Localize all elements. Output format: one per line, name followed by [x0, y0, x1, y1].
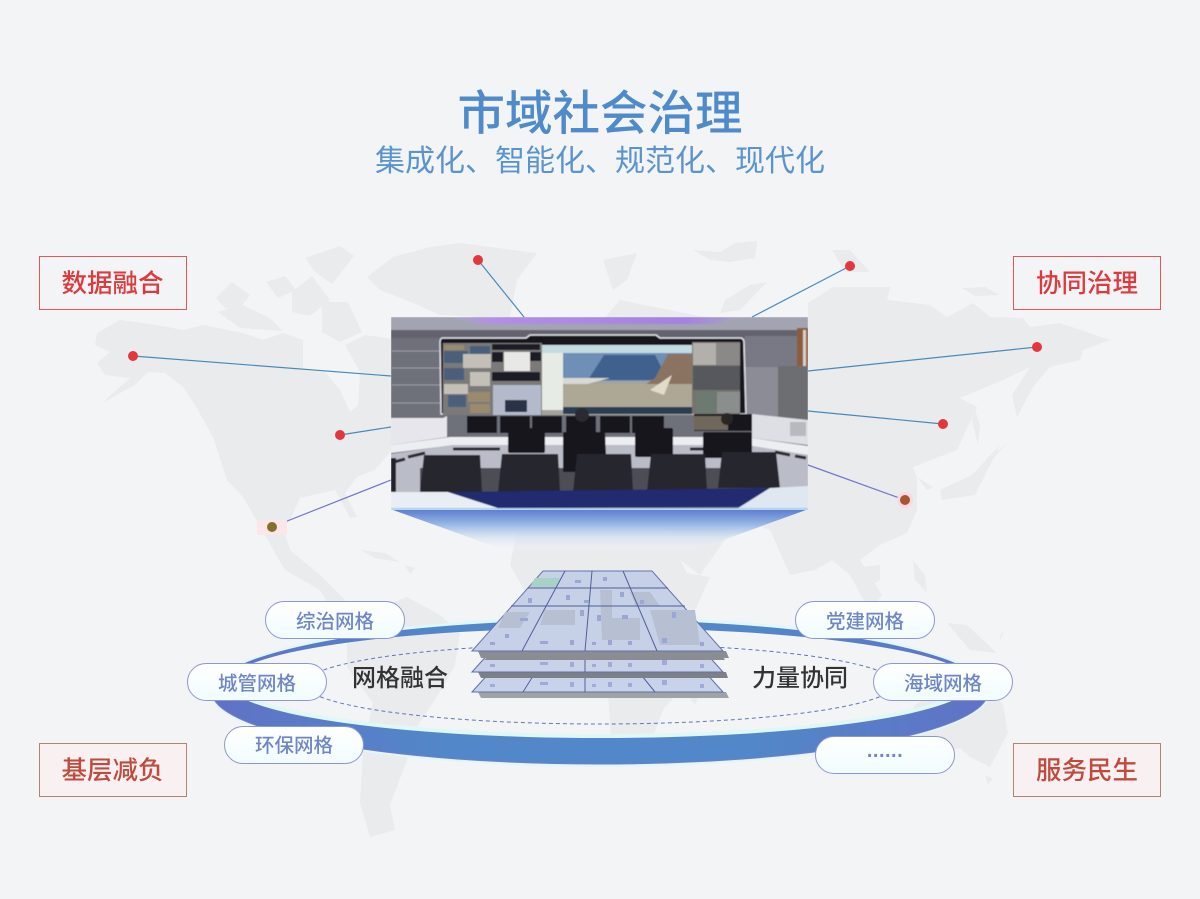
front row chairs: [420, 452, 780, 492]
video wall right panel: [692, 342, 740, 414]
map: iceland: [603, 253, 637, 290]
pill: 海域网格: [874, 664, 1012, 700]
dashed inner ellipse: [305, 644, 895, 724]
pill: ellipsis: ......: [867, 740, 903, 762]
label: 协同治理: [1014, 256, 1160, 310]
label: 服务民生: [1014, 744, 1160, 796]
map: africa: [510, 530, 710, 750]
pill: ellipsis: [816, 736, 954, 774]
building patches: [498, 590, 700, 645]
operators: [575, 408, 589, 422]
map: svalbard and arctic islands: [693, 241, 1000, 313]
pill: 党建网格: 党建网格: [826, 611, 904, 633]
label: 协同治理: 协同治理: [1036, 270, 1138, 298]
label: 基层减负: 基层减负: [61, 757, 164, 785]
side walls: [392, 351, 441, 403]
top layer: [472, 571, 729, 658]
map: caribbean islands: [360, 550, 415, 574]
pill: 城管网格: 城管网格: [218, 673, 296, 695]
left and right desk walls: [391, 416, 447, 445]
grid lines: [511, 571, 685, 651]
stacked map grid layers: [472, 571, 729, 698]
floor: [420, 468, 760, 492]
center label: 力量协同: 力量协同: [752, 665, 848, 692]
video wall frame: [440, 335, 746, 414]
bottom layer: [472, 672, 729, 698]
front desk: [391, 492, 498, 508]
middle layer: [472, 652, 728, 678]
subtitle: 集成化、智能化、规范化、现代化: [375, 145, 825, 178]
map: south america: [347, 597, 460, 837]
ceiling: [391, 317, 808, 331]
video wall center panel: [542, 380, 692, 416]
pill: 综治网格: [266, 602, 404, 638]
pill: 环保网格: 环保网格: [255, 735, 333, 757]
desk surface: [391, 437, 808, 455]
map: canadian arctic islands: [216, 246, 362, 342]
label: 服务民生: 服务民生: [1036, 757, 1138, 785]
pill: 党建网格: [796, 602, 934, 638]
pill: 城管网格: [188, 664, 326, 700]
title: 市域社会治理: [458, 88, 742, 141]
connector lines and dots: [128, 255, 1042, 535]
label: 基层减负: [40, 744, 186, 796]
video wall left panel: [443, 343, 542, 415]
light beam under photo: [393, 510, 806, 552]
desk front: [391, 445, 808, 492]
map: japan and sakhalin: [940, 410, 1010, 500]
desk monitors: [467, 414, 752, 433]
map: north america: [95, 320, 440, 630]
label: 数据融合: 数据融合: [61, 270, 164, 298]
map: madagascar: [688, 665, 708, 705]
back row chairs: [508, 428, 752, 472]
pill: 海域网格: 海域网格: [904, 673, 982, 695]
pill: 环保网格: [224, 726, 364, 764]
grid platform ring: [209, 617, 991, 767]
ring purple rim: [212, 692, 988, 764]
location marks: [490, 577, 704, 646]
map: greenland: [367, 243, 537, 317]
label: 数据融合: [40, 256, 186, 310]
map: indonesia and philippines: [860, 560, 1005, 653]
map: australia and new zealand: [905, 678, 1067, 797]
command center photo: [391, 317, 808, 510]
ring mint glow: [209, 617, 991, 767]
map: eurasia: [480, 287, 1110, 612]
ring band: [212, 620, 988, 764]
pill: 综治网格: 综治网格: [296, 611, 374, 633]
world map background: [95, 241, 1110, 837]
center label: 网格融合: 网格融合: [352, 665, 448, 692]
